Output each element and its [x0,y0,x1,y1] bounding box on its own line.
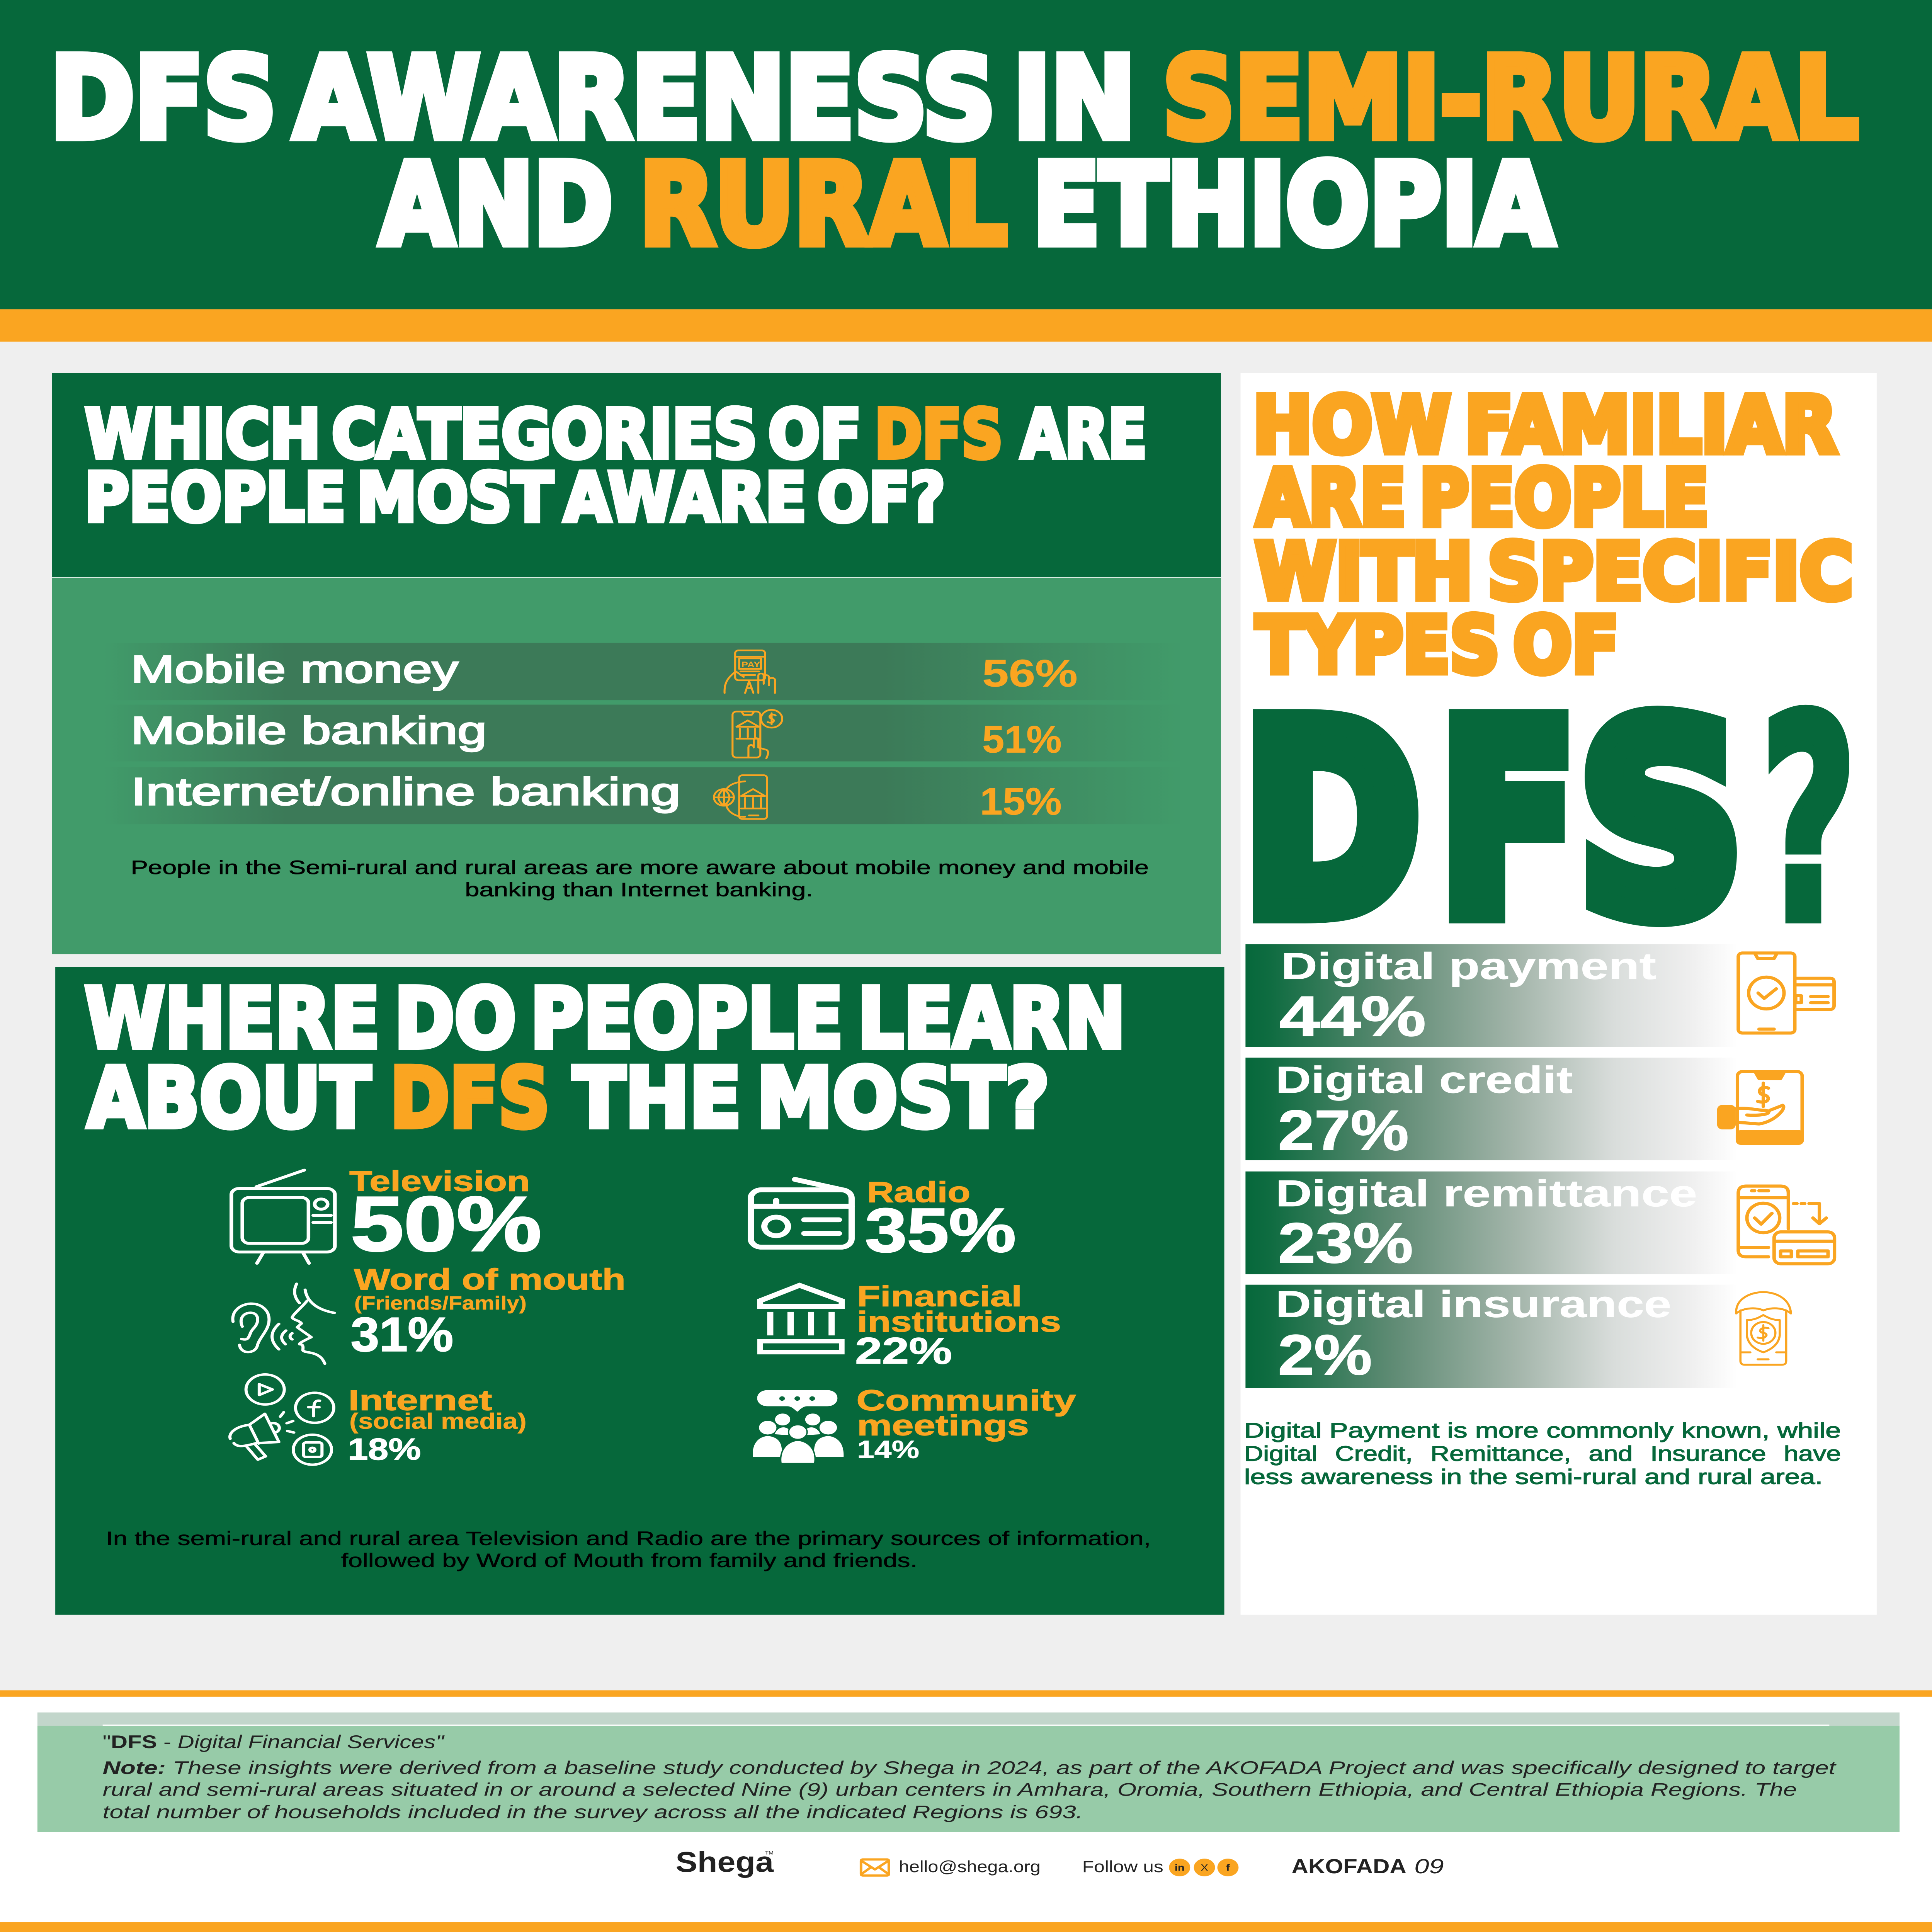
stat: internet [348,1384,527,1466]
title [50,34,1858,270]
header banner [0,0,1932,342]
panel: which categories [52,373,1221,954]
icon: community [752,1390,844,1463]
bar: digital payment: 44% [1279,985,1426,1048]
note: sources: In the semi-rural and rural area Television and Radio are the primary sources of information, [106,1527,1151,1549]
stat: word of mouth: Word of mouth [354,1263,626,1296]
icon: radio [751,1179,852,1247]
icon: digital remittance [1738,1186,1835,1264]
heading: how familiar: TYPES OF [1256,600,1619,690]
note: digital payment: Digital Payment is more commonly known, while [1244,1418,1841,1442]
icon: digital insurance [1736,1292,1791,1365]
note: digital payment: Digital Credit, Remittance, and Insurance have [1244,1442,1841,1465]
heading: where do people learn: WHERE DO PEOPLE LEARN [85,971,1126,1067]
bar: digital remittance [1245,1172,1737,1275]
bar: digital payment [1245,944,1737,1048]
icon: social links: X [1201,1862,1208,1873]
bar: digital credit [1245,1058,1737,1162]
contact email: hello@shega.org [899,1858,1041,1876]
row: internet banking [104,767,1184,824]
bar: digital remittance: Digital remittance [1276,1172,1697,1214]
icon: megaphone and social media [230,1374,334,1465]
title: RURAL [639,140,1007,270]
note: digital payment: less awareness in the semi-rural and rural area. [1244,1465,1823,1488]
stat: television: Television [349,1165,530,1197]
title: AND [380,140,613,270]
row: mobile banking: Mobile banking [131,709,487,752]
heading: where do people learn: ABOUT [87,1050,371,1146]
note: sources [106,1527,1151,1571]
stat: internet: 18% [348,1432,421,1466]
heading: DFS? [1243,658,1857,984]
heading: which categories: ARE [1021,396,1147,473]
heading: which categories: DFS [874,396,1003,473]
footnote box [37,1713,1900,1832]
bar: digital remittance: 23% [1278,1211,1413,1275]
stat: financial institutions: institutions [857,1306,1061,1338]
definition: "DFS - Digital Financial Services" [103,1732,445,1752]
edition label: 09 [1414,1855,1444,1878]
note: categories [131,857,1149,900]
heading: which categories [85,396,1147,537]
study note: rural and semi-rural areas situated in or around a selected Nine (9) urban centers in Amhara, Oromia, Southern Ethiopia, and Central Ethiopia Regions. The [103,1780,1797,1800]
heading: which categories: WHICH CATEGORIES OF [85,396,861,473]
icon: digital payment [1738,953,1834,1033]
stat: word of mouth [351,1263,626,1362]
icon: social links: in [1175,1862,1185,1873]
study note: Note: These insights were derived from a baseline study conducted by Shega in 2024, as part of the AKOFADA Project and was specifically designed to target [103,1758,1837,1778]
icon: pay phone [724,650,775,693]
stat: community meetings [856,1384,1076,1464]
row: internet banking: 15% [980,780,1062,823]
row: mobile banking [104,705,1184,761]
bar: digital credit: Digital credit [1276,1059,1573,1101]
icon: social links [1169,1859,1238,1876]
heading: DFS?: D [1243,670,1419,972]
follow us: Follow us [1082,1858,1163,1876]
note: digital payment [1244,1418,1841,1488]
stat: community meetings: 14% [857,1436,919,1464]
heading: where do people learn [85,971,1126,1146]
icon: email [861,1859,889,1876]
bar: digital credit: 27% [1278,1099,1409,1162]
icon: television [231,1170,335,1263]
stat: financial institutions [855,1280,1061,1372]
bar: digital insurance [1245,1283,1737,1388]
icon: ear and face [233,1284,334,1364]
logo: Shega: Shega [675,1846,774,1878]
title: ETHIOPIA [1033,140,1554,270]
heading: DFS?: F [1440,670,1576,972]
note: categories: People in the Semi-rural and rural areas are more aware about mobile money and mobile [131,857,1149,878]
logo: Shega: TM [765,1850,774,1856]
note: categories: banking than Internet banking. [465,879,813,900]
stat: television: 50% [351,1180,541,1267]
panel: where do people learn [55,967,1224,1615]
heading: how familiar [1253,380,1853,690]
stat: radio: Radio [867,1176,970,1209]
panel: how familiar [1240,373,1877,1615]
study note [103,1758,1837,1822]
stat: word of mouth: (Friends/Family) [354,1293,527,1314]
bar: digital insurance: Digital insurance [1276,1283,1672,1325]
bar: digital insurance: 2% [1278,1323,1372,1387]
icon: bank phone [733,710,782,759]
edition label: AKOFADA [1291,1855,1406,1878]
footer [0,1690,1932,1932]
row: mobile money [104,643,1184,700]
stat: word of mouth: 31% [351,1308,453,1362]
stat: internet: Internet [349,1384,492,1417]
icon: social links: f [1226,1862,1230,1873]
stat: radio: 35% [865,1195,1016,1265]
row: mobile money: Mobile money [131,648,459,691]
bar: digital payment: Digital payment [1281,945,1656,987]
row: mobile banking: 51% [982,718,1062,761]
icon: digital credit [1719,1071,1802,1143]
stat: community meetings: meetings [857,1409,1029,1442]
heading: how familiar: ARE PEOPLE [1257,453,1709,543]
icon: bank [760,1285,842,1352]
row: mobile money: 56% [982,652,1078,695]
heading: where do people learn: DFS [390,1050,550,1146]
heading: DFS?: S [1579,670,1743,972]
icon: pay phone: PAY [742,660,760,669]
note: sources: followed by Word of Mouth from family and friends. [341,1549,917,1571]
stat: community meetings: Community [856,1384,1076,1417]
stat: financial institutions: Financial [857,1280,1022,1313]
study note: total number of households included in the survey across all the indicated Regions is 693. [103,1802,1083,1822]
icon: online bank [714,775,767,819]
row: internet banking: Internet/online banking [131,770,680,813]
heading: which categories: PEOPLE MOST AWARE OF? [85,459,945,537]
heading: where do people learn: THE MOST? [573,1050,1049,1146]
stat: financial institutions: 22% [855,1330,952,1372]
title: DFS AWARENESS IN [50,34,1136,164]
stat: internet: (social media) [349,1409,527,1434]
